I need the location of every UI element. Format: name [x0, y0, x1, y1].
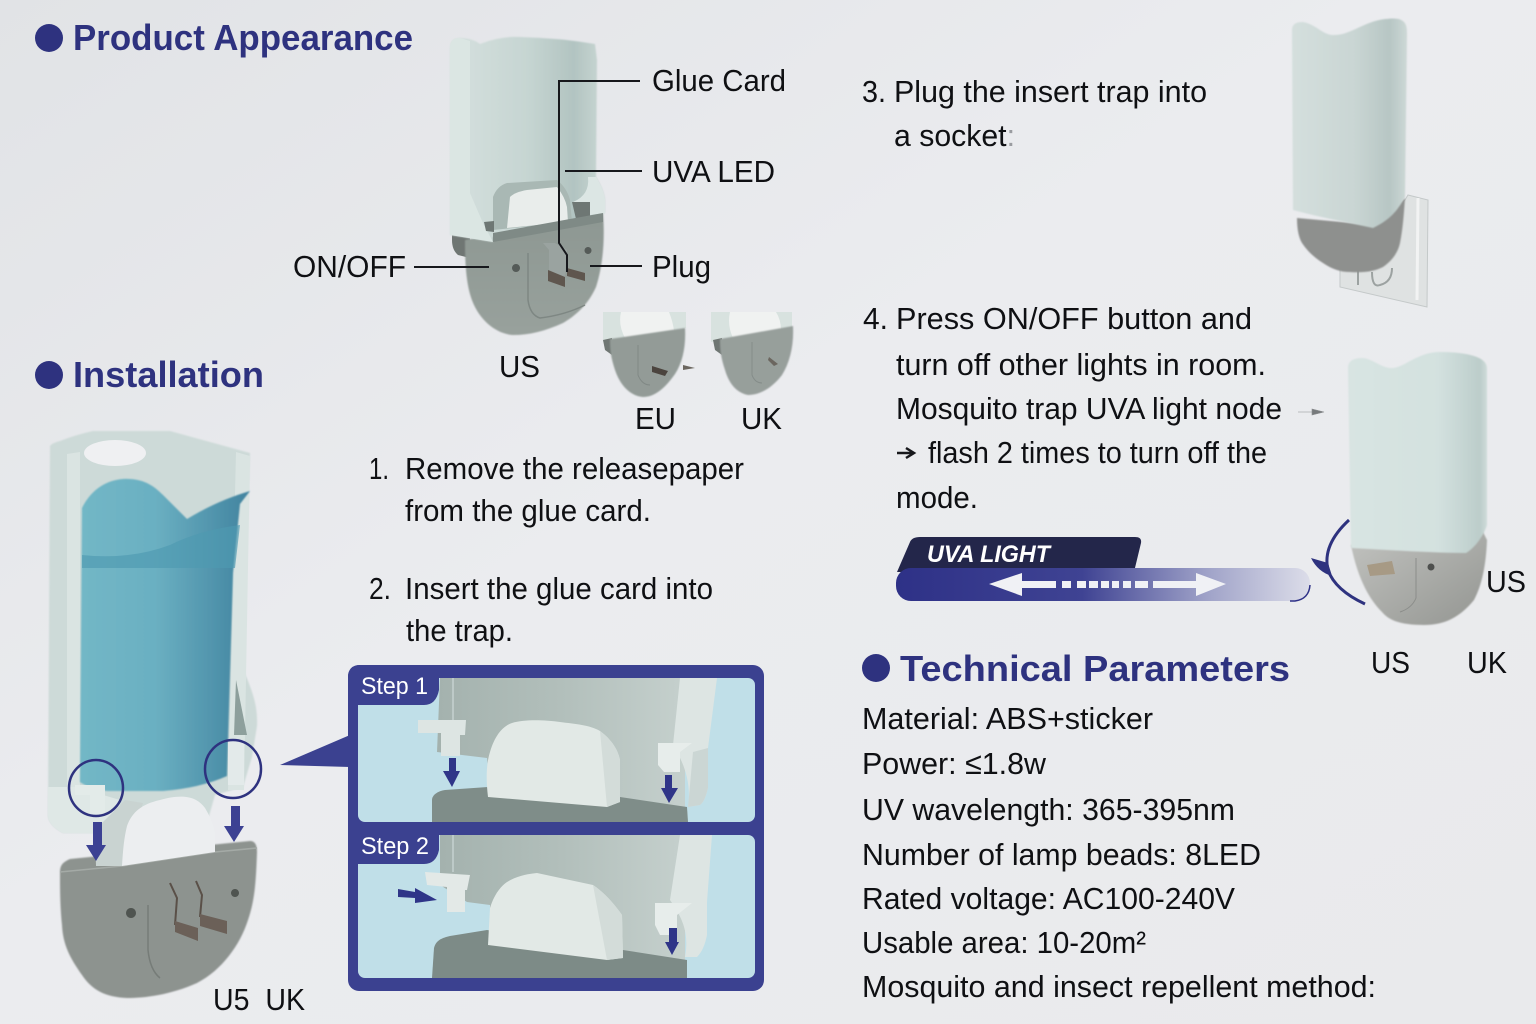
step 2 scene [358, 835, 755, 978]
white glue card [122, 797, 215, 866]
grey card back [95, 800, 143, 866]
right highlight circle [205, 740, 261, 798]
trap plugged into socket [1292, 18, 1428, 307]
base top band [493, 213, 603, 242]
tab: Step 2: Step 2 [361, 833, 429, 860]
shell [1292, 18, 1407, 228]
wall plate [1340, 195, 1428, 307]
ON/OFF tab [452, 232, 470, 258]
shell lower rim [48, 787, 120, 833]
heading: Installation: Installation [73, 354, 264, 395]
UK plug variant [711, 312, 793, 436]
instruction 1: Remove the releasepaper [405, 451, 744, 486]
US prongs [548, 268, 585, 287]
prong strips [170, 881, 202, 925]
UVA light bar [896, 537, 1310, 601]
plug plate outline [148, 905, 160, 978]
heading: Product Appearance: Product Appearance [73, 17, 413, 58]
technical parameters list: Mosquito and insect repellent method: [862, 969, 1376, 1004]
prong blades [175, 914, 227, 941]
shell [1348, 352, 1487, 553]
instruction 4: mode. [896, 480, 978, 515]
label: side US: US [1486, 564, 1526, 599]
grey base [60, 841, 257, 998]
socket details [1358, 268, 1392, 285]
trap with ON/OFF switch and rotation arrow [1311, 352, 1526, 680]
left clip [75, 785, 105, 815]
blue sheet fold [82, 525, 240, 568]
instruction 3: a socket: [894, 118, 1015, 153]
technical parameters list: Usable area: 10-20m² [862, 925, 1146, 960]
instruction 2: Insert the glue card into [405, 571, 713, 606]
label: lower US: US [1371, 645, 1410, 680]
plug plate [528, 253, 585, 318]
technical parameters list: Material: ABS+sticker [862, 701, 1153, 736]
grey base of US trap [465, 213, 604, 335]
gradient bar [896, 568, 1310, 601]
shell of US trap [450, 37, 605, 242]
screw dots [126, 889, 239, 918]
rotation arrow head [1311, 558, 1332, 576]
label: UVA LIGHT: UVA LIGHT [927, 541, 1052, 568]
panel: step detail frame [348, 665, 764, 991]
label: Plug: Plug [652, 249, 711, 284]
instruction 1 [369, 451, 744, 528]
oval hole [84, 440, 146, 466]
label: ON/OFF: ON/OFF [293, 249, 406, 284]
glue card white face [507, 187, 568, 228]
instruction 3: 3. [862, 74, 886, 109]
left down arrow [86, 822, 106, 861]
instruction 4 [863, 301, 1282, 515]
heading: Technical Parameters: Technical Parameters [900, 648, 1290, 689]
instruction 4: flash 2 times to turn off the [928, 435, 1267, 470]
grey base [1297, 198, 1405, 272]
rotation arc [1327, 520, 1365, 604]
instruction 2 [369, 571, 713, 648]
EU plug variant [603, 312, 695, 436]
label: Glue Card: Glue Card [652, 63, 786, 98]
plate inner edge [1417, 198, 1418, 300]
label: U5 UK: U5 UK [213, 982, 305, 1017]
callout lines [414, 81, 642, 272]
instruction 2: 2. [369, 571, 391, 606]
shell left rim highlight [450, 38, 493, 242]
blue glue sheet [80, 479, 250, 791]
plug metal strips [543, 243, 567, 277]
dark tab [897, 537, 1141, 572]
screw dots [512, 247, 592, 272]
small grey arrow [1298, 409, 1324, 415]
tab: Step 1 [348, 665, 439, 705]
base outline [1400, 558, 1416, 612]
technical parameters list: Power: ≤1.8w [862, 746, 1047, 781]
dot [1428, 564, 1434, 570]
instruction 4: Mosquito trap UVA light node [896, 391, 1282, 426]
instruction 3: Plug the insert trap into [894, 74, 1207, 109]
right down arrow [224, 806, 244, 842]
callout pointer [280, 735, 350, 767]
bar end outline [1290, 585, 1310, 601]
right side dark wedge [234, 680, 247, 735]
label: UVA LED: UVA LED [652, 154, 775, 189]
label: EU: EU [635, 401, 676, 436]
installation diagram: exploded trap [48, 431, 305, 1017]
label: UK: UK [741, 401, 782, 436]
technical parameters list: Number of lamp beads: 8LED [862, 837, 1261, 872]
card clips [484, 202, 590, 232]
double arrow with dashes [989, 573, 1226, 596]
right clip [228, 740, 244, 785]
label: US: US [499, 349, 540, 384]
shell right lower lip [573, 177, 605, 215]
grey base [1351, 530, 1487, 625]
translucent shell [48, 431, 257, 833]
instruction 4: 4. [863, 301, 888, 336]
product diagram: US trap with labels [293, 37, 786, 384]
technical parameters list [862, 701, 1376, 1004]
instruction 1: from the glue card. [405, 493, 651, 528]
base top edge [60, 848, 257, 872]
instruction 4: turn off other lights in room. [896, 347, 1266, 382]
instruction 2: the trap. [406, 613, 513, 648]
technical parameters list: UV wavelength: 365-395nm [862, 792, 1235, 827]
step 1 scene [358, 678, 755, 822]
label: lower UK: UK [1467, 645, 1507, 680]
instruction 3 [862, 74, 1207, 153]
instruction 1: 1. [369, 451, 389, 486]
glue card in US trap [493, 180, 572, 230]
technical parameters list: Rated voltage: AC100-240V [862, 881, 1235, 916]
instruction 4: Press ON/OFF button and [896, 301, 1252, 336]
left highlight circle [69, 760, 123, 816]
switch [1367, 561, 1395, 576]
shell inner rails [67, 452, 250, 790]
tab: Step 1: Step 1 [361, 673, 428, 700]
